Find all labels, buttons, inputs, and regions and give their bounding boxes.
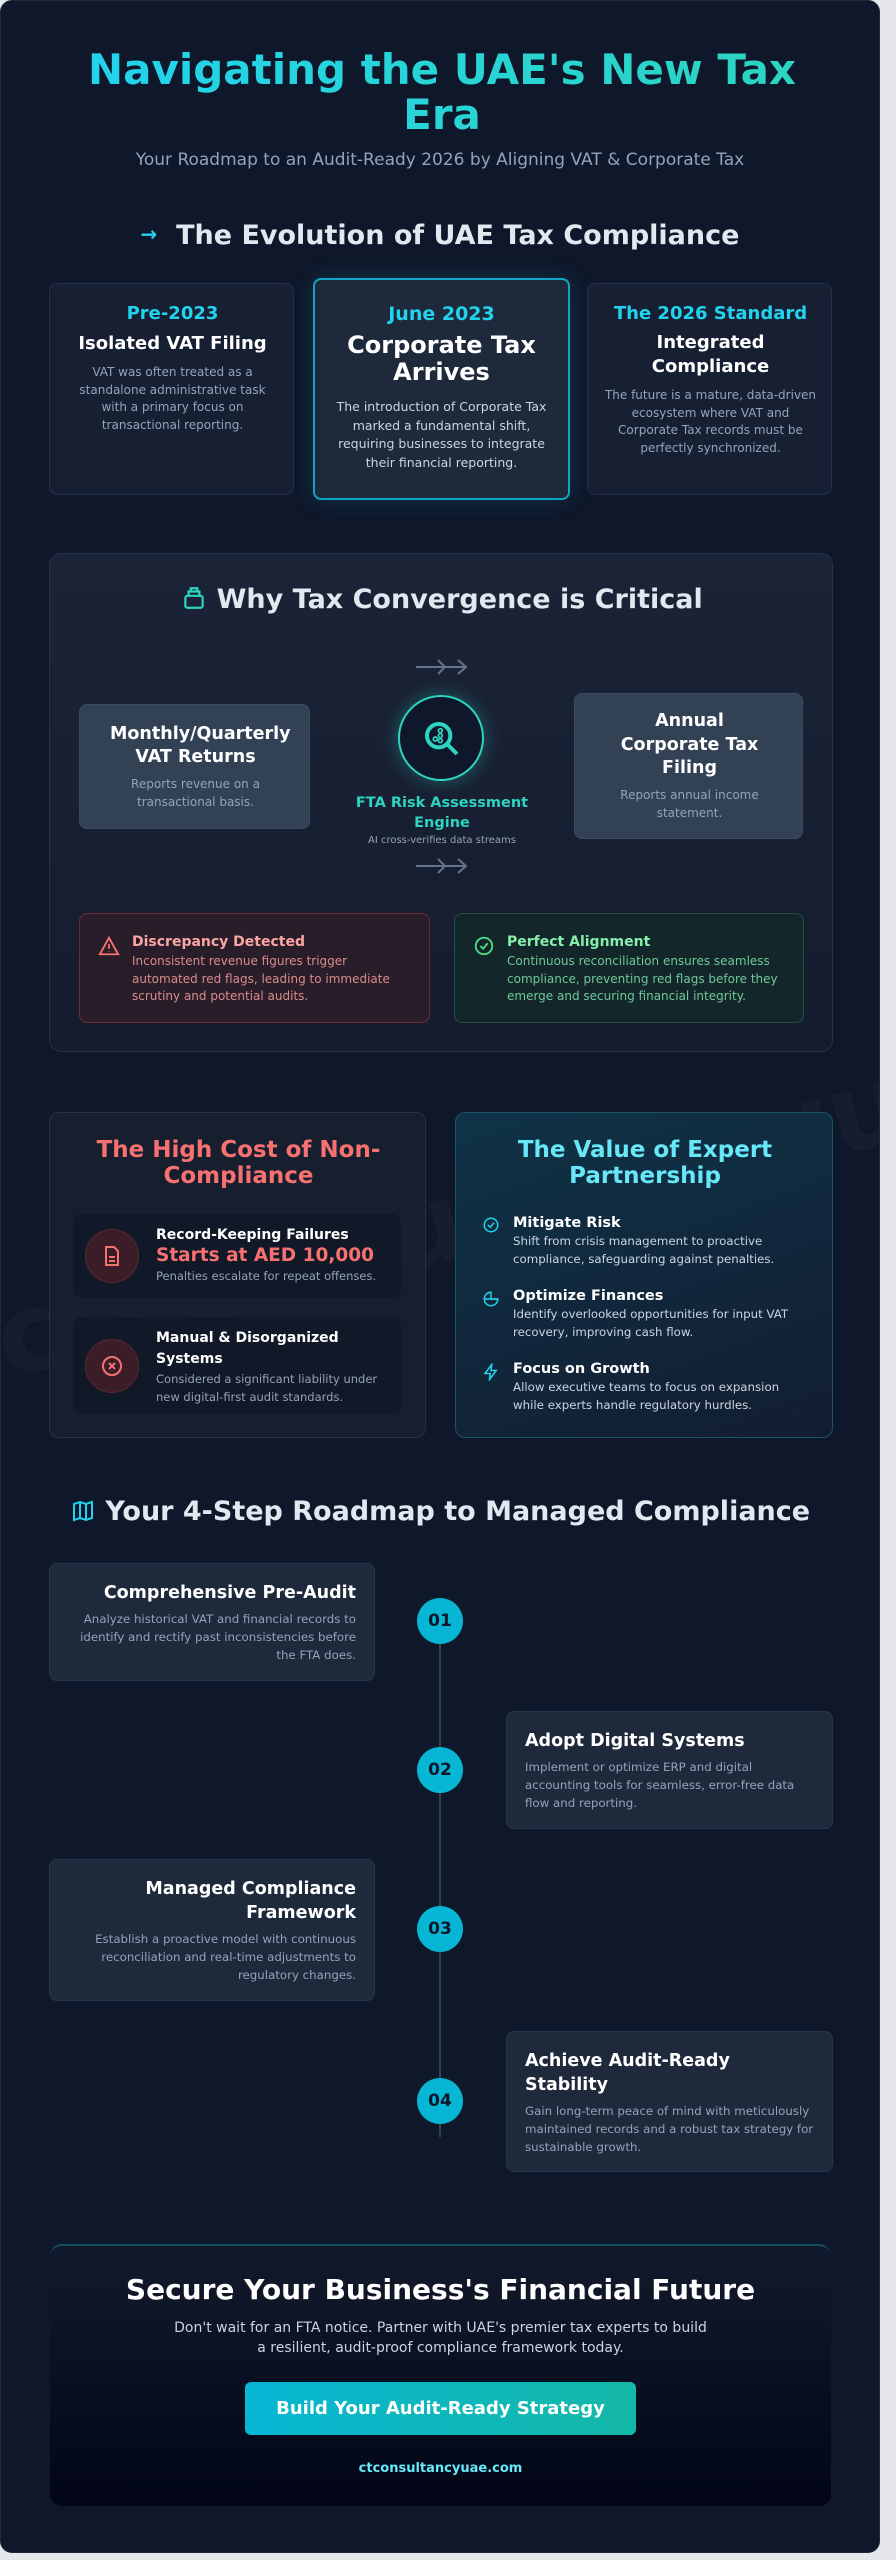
heading: evolution: → The Evolution of UAE Tax Compliance	[141, 220, 739, 251]
box: corporate tax filing: Annual Corporate Tax Filing	[621, 711, 758, 778]
item: manual systems	[73, 1317, 401, 1414]
panel: pre-2023: Pre-2023	[127, 303, 218, 324]
item: record keeping	[73, 1214, 401, 1298]
callout: discrepancy: Discrepancy Detected	[132, 934, 305, 950]
item: manual systems: Considered a significant liability under new digital-first audit standards.	[156, 1372, 377, 1404]
CTA text: a resilient, audit-proof compliance framework today.	[257, 2340, 624, 2356]
box: corporate tax filing: Reports annual income statement.	[620, 788, 759, 820]
box: VAT returns	[79, 704, 310, 829]
panel: pre-2023: Isolated VAT Filing	[78, 333, 267, 354]
CTA button: Build Your Audit-Ready Strategy	[276, 2398, 605, 2419]
CTA button	[245, 2382, 636, 2435]
step 3 marker	[417, 1906, 463, 1952]
icon: FTA engine	[398, 695, 484, 781]
panel: why convergence	[49, 553, 833, 1052]
step 4 marker: 04	[428, 2091, 452, 2111]
item: mitigate risk: Mitigate Risk	[513, 1215, 621, 1231]
item: record keeping: Penalties escalate for repeat offenses.	[156, 1269, 376, 1283]
panel: 2026 standard: Integrated Compliance	[652, 332, 769, 377]
item: manual systems: Manual & Disorganized Systems	[156, 1330, 339, 1367]
panel: june 2023: June 2023	[388, 303, 495, 325]
step 3 card: Managed Compliance Framework	[145, 1879, 356, 1923]
label: FTA engine: FTA Risk Assessment	[356, 795, 528, 811]
CTA text: Don't wait for an FTA notice. Partner with UAE's premier tax experts to build	[174, 2320, 707, 2336]
panel: june 2023	[313, 278, 570, 500]
CTA panel	[50, 2244, 831, 2506]
panel: 2026 standard: The future is a mature, data-driven ecosystem where VAT and Corporate Tax records must be perfectly synchronized.	[605, 388, 816, 454]
title: Navigating the UAE's New Tax Era	[88, 45, 796, 139]
panel: expert partnership: The Value of Expert Partnership	[518, 1137, 772, 1189]
arrow bottom	[416, 858, 468, 874]
CTA link: ctconsultancyuae.com	[359, 2461, 522, 2476]
item: focus on growth	[484, 1361, 779, 1412]
item: optimize finances	[484, 1288, 788, 1339]
timeline line	[439, 1620, 441, 2137]
step 1 card: Comprehensive Pre-Audit	[104, 1583, 356, 1603]
step 1 marker	[417, 1598, 463, 1644]
panel: 2026 standard: The 2026 Standard	[614, 303, 807, 324]
step 4 card: Achieve Audit-Ready Stability	[525, 2051, 730, 2095]
step 2 marker: 02	[428, 1760, 452, 1780]
label: FTA engine: AI cross-verifies data streams	[368, 835, 516, 846]
step 2 card	[506, 1711, 833, 1829]
item: focus on growth: Allow executive teams to focus on expansion while experts handle regulatory hurdles.	[513, 1380, 779, 1412]
heading: why convergence: Why Tax Convergence is Critical	[217, 584, 703, 615]
step 3 card	[49, 1859, 375, 2001]
panel: 2026 standard	[587, 283, 832, 495]
item: optimize finances: Identify overlooked opportunities for input VAT recovery, improving cash flow.	[513, 1307, 788, 1339]
panel: june 2023: Corporate Tax Arrives	[347, 331, 536, 386]
callout: alignment	[454, 913, 804, 1023]
box: VAT returns: Monthly/Quarterly VAT Returns	[110, 724, 291, 767]
heading: roadmap: Your 4-Step Roadmap to Managed Compliance	[105, 1496, 810, 1527]
step 4 card	[506, 2031, 833, 2172]
item: focus on growth: Focus on Growth	[513, 1361, 650, 1377]
step 1 card: Analyze historical VAT and financial records to identify and rectify past inconsistencies before the FTA does.	[80, 1612, 356, 1662]
subtitle: Your Roadmap to an Audit-Ready 2026 by Aligning VAT & Corporate Tax	[136, 150, 744, 170]
box: VAT returns: Reports revenue on a transactional basis.	[131, 777, 260, 808]
panel: june 2023: The introduction of Corporate Tax marked a fundamental shift, requiring businesses to integrate their financial reporting.	[337, 399, 546, 470]
step 2 card: Adopt Digital Systems	[525, 1731, 745, 1751]
item: record keeping: Record-Keeping Failures	[156, 1227, 349, 1243]
callout: alignment: Continuous reconciliation ensures seamless compliance, preventing red flags before they emerge and securing financial integrity.	[507, 954, 778, 1003]
CTA heading: Secure Your Business's Financial Future	[126, 2273, 755, 2306]
step 1 marker: 01	[428, 1611, 452, 1631]
item: optimize finances: Optimize Finances	[513, 1288, 663, 1304]
item: record keeping: Starts at AED 10,000	[156, 1245, 374, 1266]
step 3 marker: 03	[428, 1919, 452, 1939]
arrow top	[416, 659, 468, 675]
box: corporate tax filing	[574, 693, 803, 839]
item: mitigate risk: Shift from crisis management to proactive compliance, safeguarding against penalties.	[513, 1234, 774, 1266]
callout: discrepancy	[79, 913, 430, 1023]
panel: cost of non-compliance: The High Cost of Non-Compliance	[97, 1137, 380, 1189]
step 3 card: Establish a proactive model with continuous reconciliation and real-time adjustments to regulatory changes.	[95, 1932, 356, 1982]
label: FTA engine: Engine	[414, 815, 470, 831]
item: mitigate risk	[484, 1215, 774, 1266]
step 1 card	[49, 1563, 375, 1681]
CTA text	[174, 2320, 707, 2356]
panel: expert partnership	[455, 1112, 833, 1438]
step 2 card: Implement or optimize ERP and digital accounting tools for seamless, error-free data flow and reporting.	[525, 1760, 794, 1810]
step 2 marker	[417, 1747, 463, 1793]
panel: pre-2023: VAT was often treated as a standalone administrative task with a primary focus on transactional reporting.	[79, 365, 266, 432]
callout: alignment: Perfect Alignment	[507, 934, 650, 950]
label: FTA engine	[356, 795, 528, 846]
panel: cost of non-compliance	[49, 1112, 426, 1438]
step 4 card: Gain long-term peace of mind with meticulously maintained records and a robust tax strategy for sustainable growth.	[525, 2104, 813, 2154]
callout: discrepancy: Inconsistent revenue figures trigger automated red flags, leading to immediate scrutiny and potential audits.	[132, 954, 390, 1003]
step 4 marker	[417, 2078, 463, 2124]
panel: pre-2023	[49, 283, 294, 495]
